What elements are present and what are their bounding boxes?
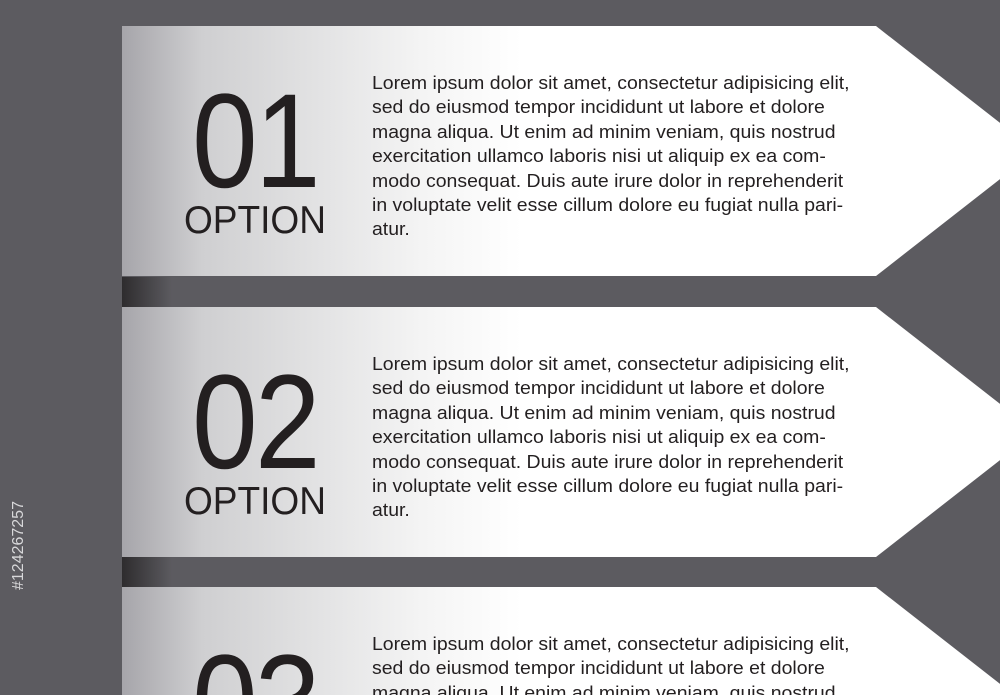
text block 1: sed do eiusmod tempor incididunt ut labore et dolore [372,97,825,117]
text block 1: Lorem ipsum dolor sit amet, consectetur adipisicing elit, [372,73,850,93]
text block 3: Lorem ipsum dolor sit amet, consectetur adipisicing elit, [372,634,850,654]
text block 1: in voluptate velit esse cillum dolore eu fugiat nulla pari- [372,195,843,215]
panel: option 01: 01 [192,67,318,216]
text block 2: in voluptate velit esse cillum dolore eu fugiat nulla pari- [372,476,843,496]
text block 1: magna aliqua. Ut enim ad minim veniam, quis nostrud [372,122,836,142]
text block 2: modo consequat. Duis aute irure dolor in reprehenderit [372,452,843,472]
text block 1 [372,73,850,239]
text block 1: exercitation ullamco laboris nisi ut aliquip ex ea com- [372,146,826,166]
panel: option 02: 02 [192,348,318,497]
panel: option 01: OPTION [184,199,326,242]
number 02 [184,348,326,523]
text block 2 [372,354,850,520]
text block 2: sed do eiusmod tempor incididunt ut labore et dolore [372,378,825,398]
text block 3 [372,634,850,695]
text block 3: sed do eiusmod tempor incididunt ut labore et dolore [372,658,825,678]
text block 2: atur. [372,500,410,520]
text block 2: Lorem ipsum dolor sit amet, consectetur adipisicing elit, [372,354,850,374]
number 01 [184,67,326,242]
panel: option 01 [122,26,1000,276]
panel: option 03 [122,587,1000,695]
side id text: #124267257 [10,501,27,590]
text block 1: atur. [372,219,410,239]
text block 2: exercitation ullamco laboris nisi ut aliquip ex ea com- [372,427,826,447]
text block 1: modo consequat. Duis aute irure dolor in reprehenderit [372,171,843,191]
text block 2: magna aliqua. Ut enim ad minim veniam, quis nostrud [372,403,836,423]
panel: option 02 [122,307,1000,557]
panel: option 02: OPTION [184,480,326,523]
